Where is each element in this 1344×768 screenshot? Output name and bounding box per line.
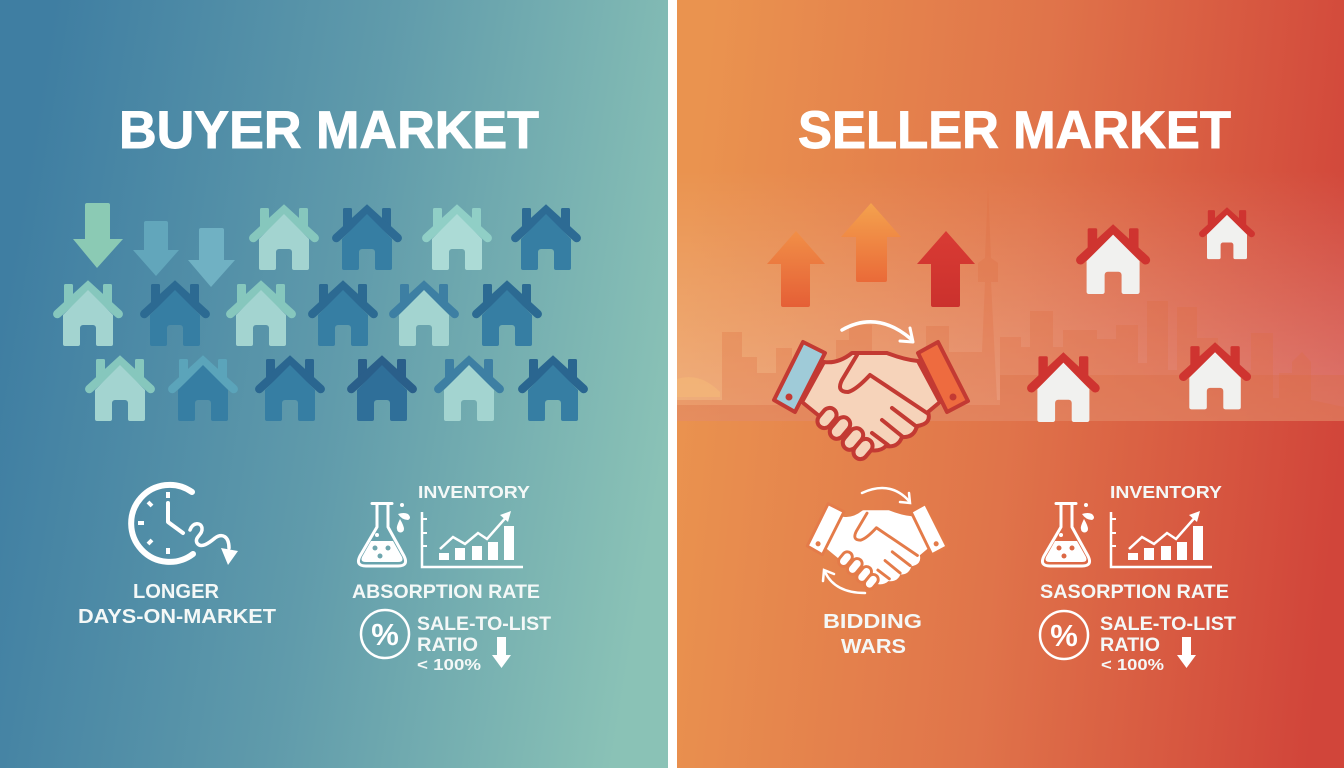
house <box>230 284 292 346</box>
label: absorption rate: ABSORPTION RATE <box>352 582 540 603</box>
house <box>426 208 488 270</box>
house <box>1183 346 1247 409</box>
icon: clock with wavy arrow <box>131 485 238 565</box>
house <box>172 359 234 421</box>
icon: up arrows <box>767 203 975 307</box>
panel: buyer market <box>0 0 668 768</box>
house <box>393 284 455 346</box>
house <box>522 359 584 421</box>
icon: percent circle: % <box>1050 618 1078 653</box>
icon: orange up arrow <box>767 231 825 307</box>
label: sale-to-list ratio <box>417 614 551 674</box>
panel: seller market <box>677 0 1344 768</box>
house <box>144 284 206 346</box>
label: bidding wars: BIDDING <box>823 611 922 633</box>
chart: rising bars <box>1111 511 1212 567</box>
icon: light blue down arrow <box>188 228 235 287</box>
arrows: curved around white handshake <box>823 488 910 593</box>
icon: white handshake <box>807 504 947 591</box>
skyline <box>677 186 1344 421</box>
house <box>57 284 119 346</box>
house <box>336 208 398 270</box>
icon: red up arrow <box>917 231 975 307</box>
house <box>1031 356 1095 422</box>
label: sale-to-list ratio: SALE-TO-LIST <box>417 614 551 635</box>
label: longer days-on-market: DAYS-ON-MARKET <box>78 606 276 628</box>
house <box>1202 210 1252 259</box>
house <box>259 359 321 421</box>
house grid <box>57 208 584 421</box>
icon: small down arrow <box>492 637 511 668</box>
chart: rising bars <box>422 511 523 567</box>
label: sasorption rate: SASORPTION RATE <box>1040 582 1229 603</box>
label: sale-to-list ratio <box>1100 614 1236 674</box>
icon: percent circle <box>361 610 409 658</box>
house <box>515 208 577 270</box>
icon: amber up arrow <box>841 203 901 282</box>
house <box>253 208 315 270</box>
icon: blue down arrow <box>133 221 179 276</box>
title: buyer market: BUYER MARKET <box>119 101 539 160</box>
icon: flask <box>358 503 410 566</box>
arrow: curved over handshake <box>842 322 913 342</box>
icon: percent circle <box>1040 611 1088 659</box>
house <box>1081 228 1146 294</box>
house row 3 <box>89 359 584 421</box>
house <box>476 284 538 346</box>
house row 1 <box>253 208 577 270</box>
house <box>89 359 151 421</box>
label: sale-to-list ratio: SALE-TO-LIST <box>1100 614 1236 635</box>
icon: percent circle: % <box>371 617 399 652</box>
label: bidding wars <box>823 611 922 658</box>
dome <box>677 377 720 397</box>
icon: small down arrow <box>1177 637 1196 668</box>
icon: handshake <box>774 342 968 462</box>
haze above the skyline <box>677 170 1344 421</box>
label: sale-to-list ratio: RATIO <box>417 635 478 656</box>
label: sale-to-list ratio: < 100% <box>1101 657 1164 674</box>
label: longer days-on-market <box>78 581 276 628</box>
label: inventory: INVENTORY <box>1110 482 1222 502</box>
house row 2 <box>57 284 538 346</box>
label: sale-to-list ratio: RATIO <box>1100 635 1160 656</box>
divider <box>668 0 677 768</box>
icon: green down arrow <box>73 203 123 268</box>
label: inventory: INVENTORY <box>418 482 530 502</box>
icon: down arrows <box>73 203 235 287</box>
label: sale-to-list ratio: < 100% <box>417 657 481 674</box>
icon: flask <box>1042 503 1094 566</box>
house <box>438 359 500 421</box>
label: longer days-on-market: LONGER <box>133 581 220 603</box>
house <box>312 284 374 346</box>
label: bidding wars: WARS <box>841 636 906 658</box>
house <box>351 359 413 421</box>
houses <box>1031 210 1252 422</box>
title: seller market: SELLER MARKET <box>798 101 1231 160</box>
